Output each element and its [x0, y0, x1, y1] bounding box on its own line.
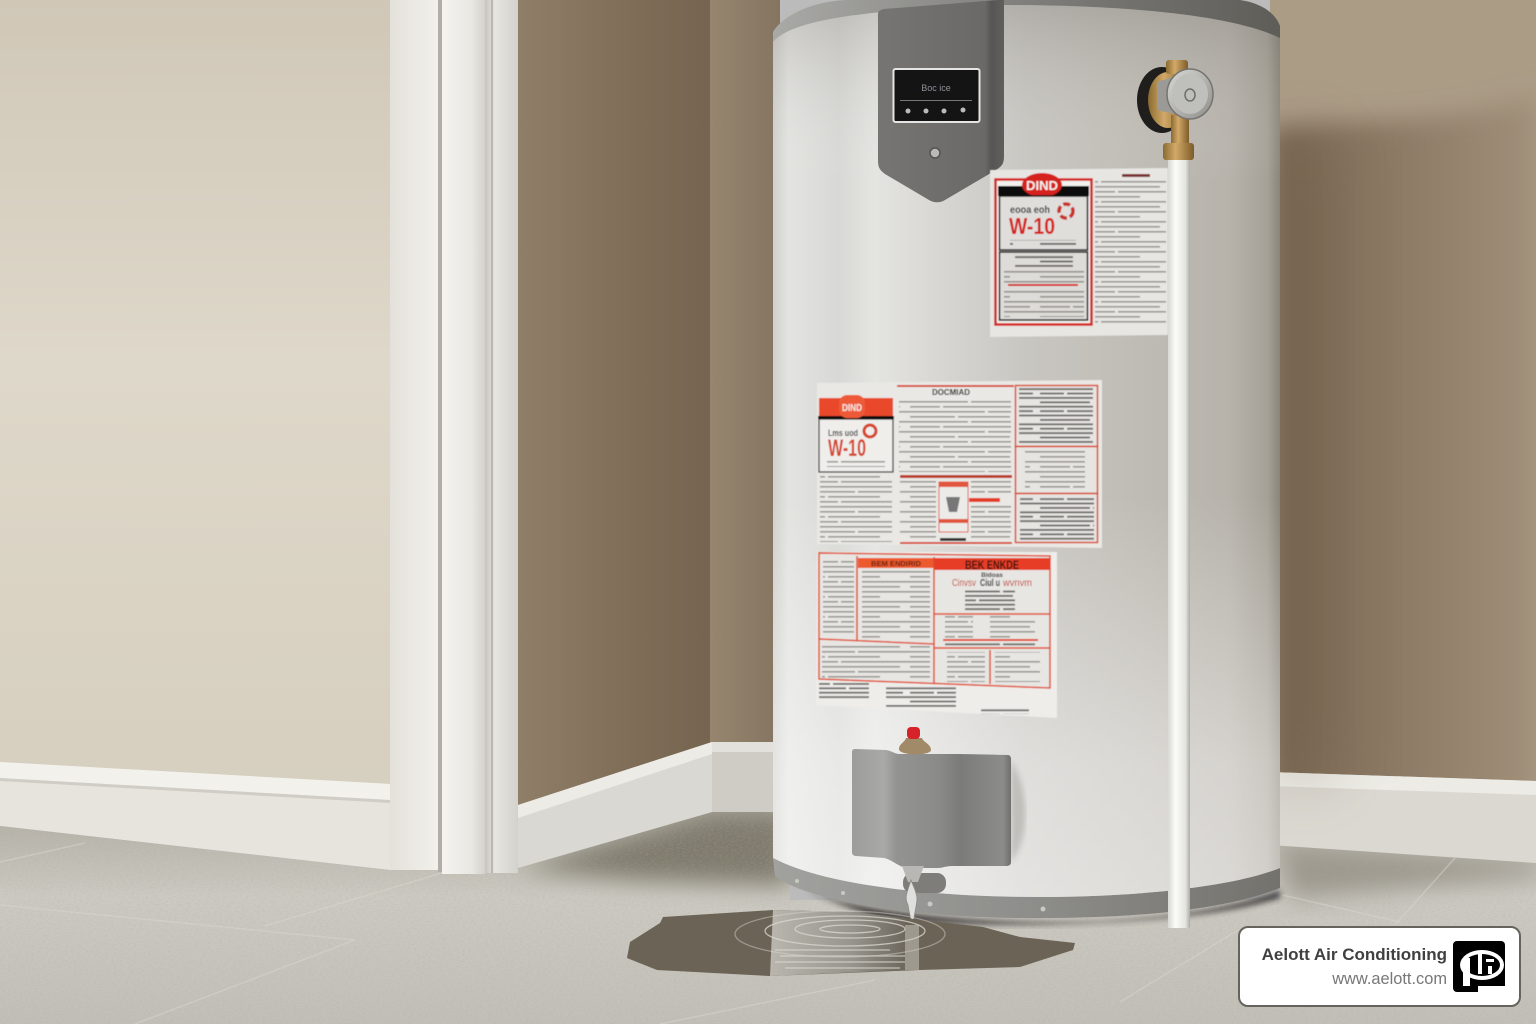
- sticker badge: [839, 395, 865, 418]
- tank shadow on floor: [790, 885, 1280, 925]
- brand card: [1239, 927, 1520, 1006]
- label: upper sticker: [990, 168, 1168, 337]
- label: middle sticker: DOCMIAD: [932, 387, 970, 397]
- brand name: Aelott Air Conditioning: [1262, 945, 1447, 964]
- label: middle sticker: Lms uod: [828, 428, 858, 438]
- white pipe: [1168, 160, 1190, 928]
- drain panel shadow: [1011, 760, 1025, 862]
- display: Boc ice: [921, 83, 951, 93]
- tank shadow on wall: [1278, 130, 1330, 780]
- label: upper sticker: W-10: [1009, 213, 1055, 239]
- tank body: [773, 5, 1280, 897]
- control panel: [878, 0, 1004, 202]
- red drain knob: [899, 727, 931, 754]
- drain spigot: [902, 866, 946, 893]
- tank base ring: [773, 858, 1280, 918]
- sticker badge: DIND: [1026, 178, 1058, 193]
- tank shading overlay: [773, 5, 1280, 897]
- right wall: [1270, 0, 1536, 800]
- panel screw: [930, 148, 940, 158]
- tank lid: [773, 0, 1280, 44]
- right baseboard: [1270, 772, 1536, 863]
- label: lower sticker: Ciul u: [980, 578, 1000, 589]
- label: lower sticker: wvnvm: [1002, 578, 1032, 589]
- label: upper sticker: eooa eoh: [1010, 205, 1050, 216]
- label: lower sticker: BEM ENDIRID: [871, 561, 921, 568]
- label: lower sticker: Bidoas: [981, 572, 1003, 579]
- water heater: [773, 0, 1280, 928]
- small diagram: [939, 482, 968, 532]
- drain panel: [852, 749, 1011, 868]
- label: lower sticker: Cinvsv: [952, 578, 976, 589]
- center wall: [518, 0, 710, 810]
- brand URL: www.aelott.com: [1331, 970, 1447, 988]
- door frame: [390, 0, 518, 874]
- water puddle: [627, 910, 1075, 976]
- water stream: [906, 880, 917, 924]
- label: lower sticker: BEK ENKDE: [965, 560, 1019, 572]
- stream reflection: [905, 925, 919, 970]
- center baseboards: [518, 742, 790, 868]
- ring rivets: [795, 879, 1182, 912]
- left baseboard: [0, 762, 390, 870]
- center wall right return: [710, 0, 780, 760]
- sticker badge: [1022, 173, 1062, 197]
- display: [894, 69, 980, 122]
- label: lower sticker: [816, 552, 1057, 718]
- sticker badge: DIND: [842, 403, 862, 414]
- label: middle sticker: [817, 380, 1102, 548]
- relief valve: [1137, 60, 1213, 160]
- left wall: [0, 0, 392, 800]
- label: middle sticker: W-10: [828, 435, 866, 462]
- brand logo: [1453, 941, 1505, 992]
- floor: [0, 812, 1536, 1024]
- floor tile joints: [0, 843, 1455, 1024]
- puddle ripples: [735, 911, 945, 968]
